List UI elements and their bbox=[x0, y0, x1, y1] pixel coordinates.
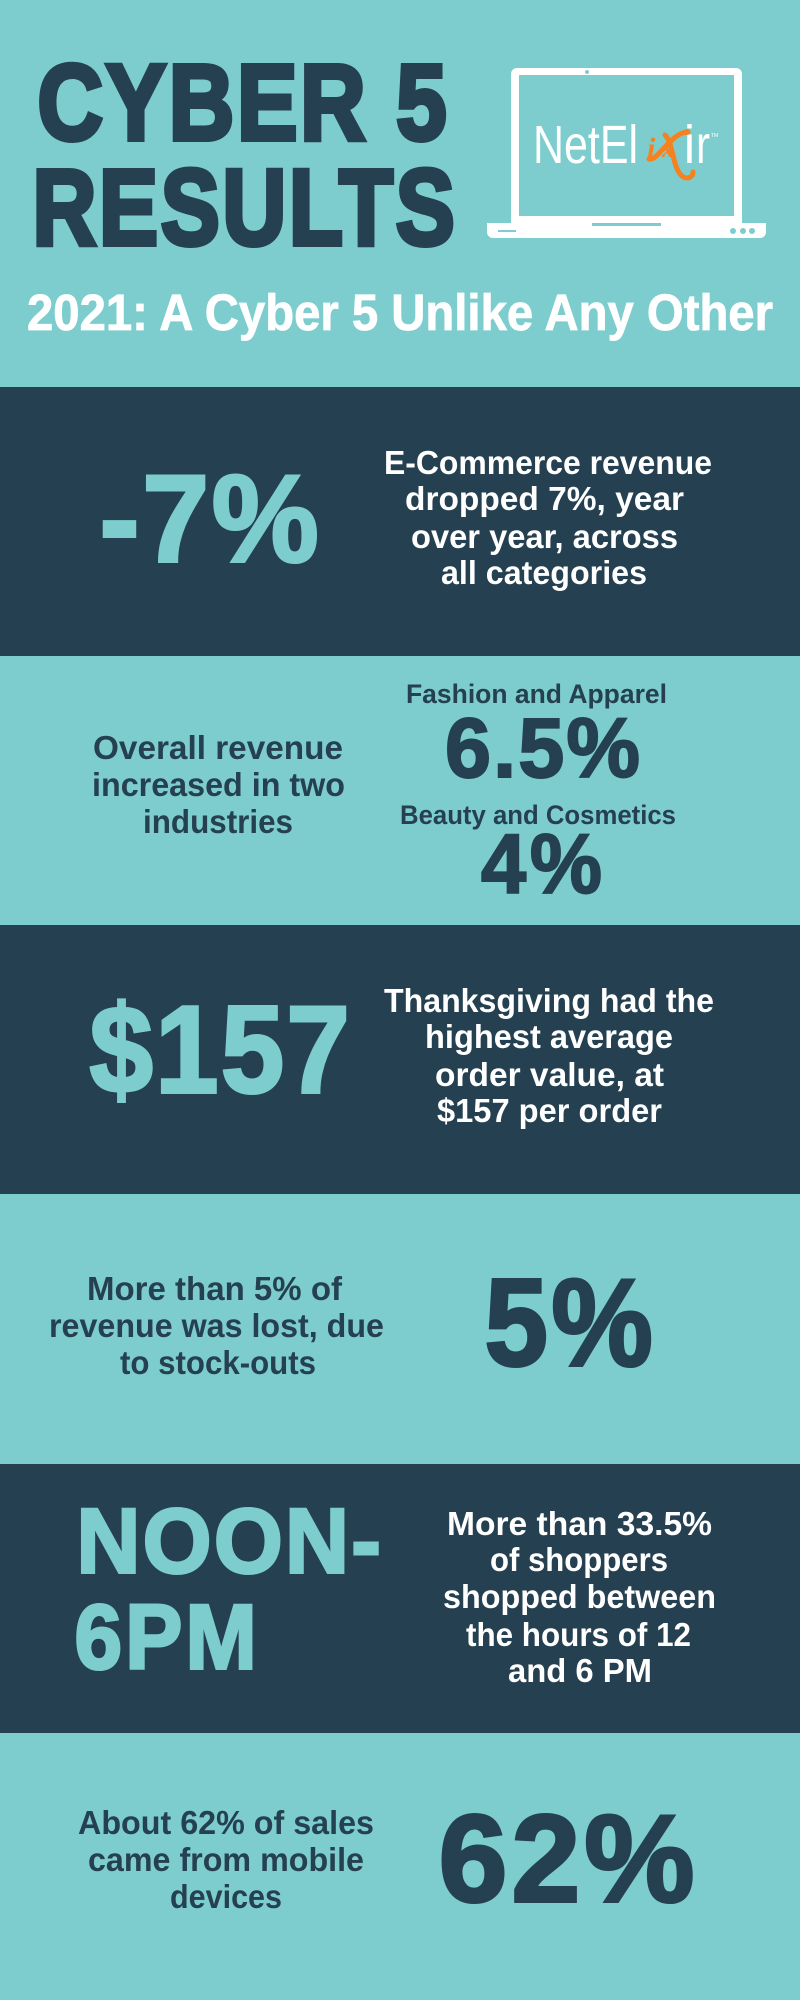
text: peak hours description: of shoppers bbox=[490, 1541, 668, 1578]
title bbox=[32, 43, 455, 267]
stat: 5%: 5% bbox=[484, 1254, 653, 1393]
label: Fashion and Apparel: Fashion and Apparel bbox=[406, 679, 667, 709]
logo: NetElixir: i bbox=[684, 115, 695, 175]
text: revenue drop description: dropped 7%, year bbox=[405, 480, 684, 517]
text: mobile sales description: devices bbox=[170, 1878, 282, 1915]
text: mobile sales description bbox=[78, 1804, 374, 1915]
logo: NetElixir: i bbox=[647, 132, 656, 165]
stat: NOON-6PM: NOON- bbox=[76, 1490, 381, 1593]
panel: industries bbox=[92, 679, 676, 911]
text: overall revenue description bbox=[92, 729, 345, 840]
panel: average order value bbox=[0, 925, 800, 1194]
text: revenue drop description: E-Commerce revenue bbox=[384, 444, 712, 481]
text: average order value description: highest average bbox=[425, 1018, 673, 1055]
text: revenue drop description bbox=[384, 444, 712, 591]
text: overall revenue description: increased in two bbox=[92, 766, 345, 803]
text: mobile sales description: About 62% of sales bbox=[78, 1804, 374, 1841]
text: stock-outs description bbox=[49, 1270, 384, 1381]
header bbox=[27, 43, 773, 341]
text: peak hours description: and 6 PM bbox=[508, 1652, 652, 1689]
text: stock-outs description: revenue was lost, due bbox=[49, 1307, 384, 1344]
stat: NOON-6PM bbox=[74, 1490, 381, 1688]
title: CYBER 5 bbox=[38, 43, 447, 163]
stat: -7%: -7% bbox=[100, 449, 319, 588]
icon: laptop with NetElixir logo bbox=[487, 68, 766, 238]
logo: NetElixir bbox=[533, 115, 718, 178]
stat: 6.5%: 6.5% bbox=[445, 700, 640, 795]
text: peak hours description bbox=[443, 1505, 716, 1689]
stat: 4%: 4% bbox=[481, 816, 602, 911]
text: stock-outs description: to stock-outs bbox=[120, 1344, 316, 1381]
text: overall revenue description: industries bbox=[143, 803, 293, 840]
text: overall revenue description: Overall revenue bbox=[93, 729, 343, 766]
text: peak hours description: shopped between bbox=[443, 1578, 716, 1615]
panel: revenue drop bbox=[0, 387, 800, 656]
logo: NetElixir: r bbox=[696, 115, 710, 175]
stat: NOON-6PM: 6PM bbox=[74, 1586, 257, 1688]
text: peak hours description: the hours of 12 bbox=[466, 1616, 691, 1653]
stat: 62%: 62% bbox=[438, 1790, 694, 1928]
label: Beauty and Cosmetics: Beauty and Cosmetics bbox=[400, 800, 676, 830]
title: RESULTS bbox=[32, 147, 455, 267]
text: revenue drop description: all categories bbox=[441, 554, 647, 591]
panel: stock-outs bbox=[49, 1254, 653, 1393]
text: average order value description: Thanksgiving had the bbox=[384, 982, 714, 1019]
text: peak hours description: More than 33.5% bbox=[447, 1505, 712, 1542]
text: average order value description: order value, at bbox=[435, 1056, 664, 1093]
panel: peak hours bbox=[0, 1464, 800, 1733]
text: average order value description: $157 per order bbox=[437, 1092, 662, 1129]
logo: NetElixir: x bbox=[661, 137, 674, 163]
panel: mobile sales bbox=[78, 1790, 694, 1928]
text: revenue drop description: over year, across bbox=[411, 518, 678, 555]
stat: $157: $157 bbox=[90, 981, 350, 1120]
text: stock-outs description: More than 5% of bbox=[87, 1270, 343, 1307]
logo: NetElixir: TM bbox=[711, 133, 718, 139]
text: average order value description bbox=[384, 982, 714, 1129]
logo: NetElixir: NetEl bbox=[533, 115, 638, 175]
text: mobile sales description: came from mobile bbox=[88, 1841, 364, 1878]
